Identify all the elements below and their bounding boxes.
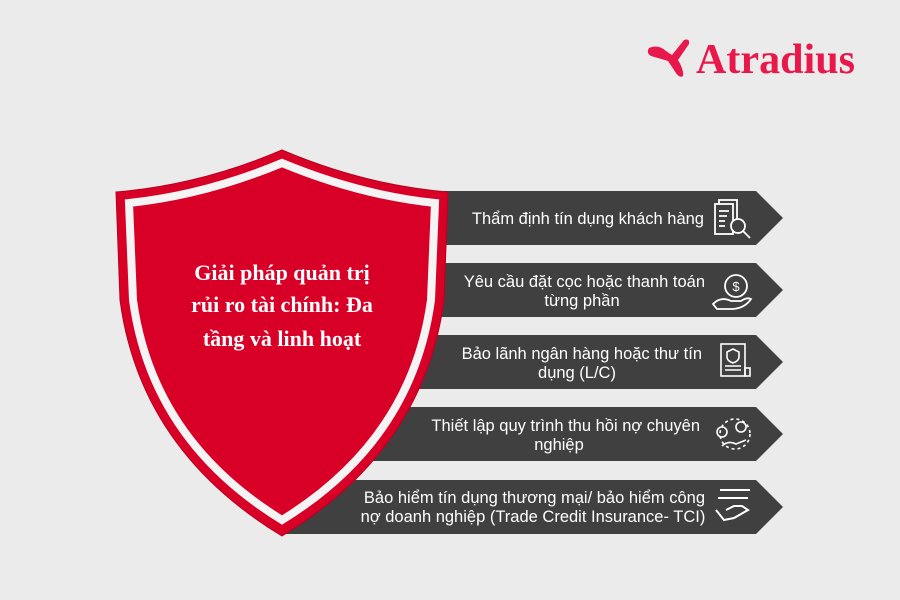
shield title: rủi ro tài chính: Đa [191, 292, 373, 317]
bar 5 [280, 480, 783, 534]
bar 3: Bảo lãnh ngân hàng hoặc thư tín [462, 345, 702, 363]
bar 2: Yêu cầu đặt cọc hoặc thanh toán [464, 273, 705, 291]
icon: Atradius logo mark [648, 40, 689, 77]
bar 2 [280, 263, 783, 317]
bar 4: Thiết lập quy trình thu hồi nợ chuyên [431, 417, 700, 435]
icon: debt collection [717, 419, 750, 449]
icon: document search [715, 200, 750, 238]
bar 3: dụng (L/C) [538, 364, 616, 382]
bar 5: Bảo hiểm tín dụng thương mại/ bảo hiểm công [364, 489, 705, 507]
bar 4: nghiệp [534, 436, 584, 454]
logo: Atradius [648, 37, 855, 83]
shield title: Giải pháp quản trị [194, 260, 370, 285]
logo text: Atradius [696, 37, 855, 83]
icon: handshake [716, 490, 750, 520]
bar 4 [280, 407, 783, 461]
icon: money hand [713, 275, 751, 309]
bar 1: Thẩm định tín dụng khách hàng [472, 210, 704, 228]
shield title: tầng và linh hoạt [203, 326, 362, 351]
bar 2: từng phần [544, 292, 620, 310]
shield title [191, 260, 373, 351]
bar 5: nợ doanh nghiệp (Trade Credit Insurance- TCI) [361, 508, 705, 526]
bar 1 [280, 191, 783, 245]
bar 3 [280, 335, 783, 389]
shield [116, 150, 448, 536]
icon: money hand: $ [732, 279, 740, 294]
icon: guarantee document [721, 344, 750, 376]
